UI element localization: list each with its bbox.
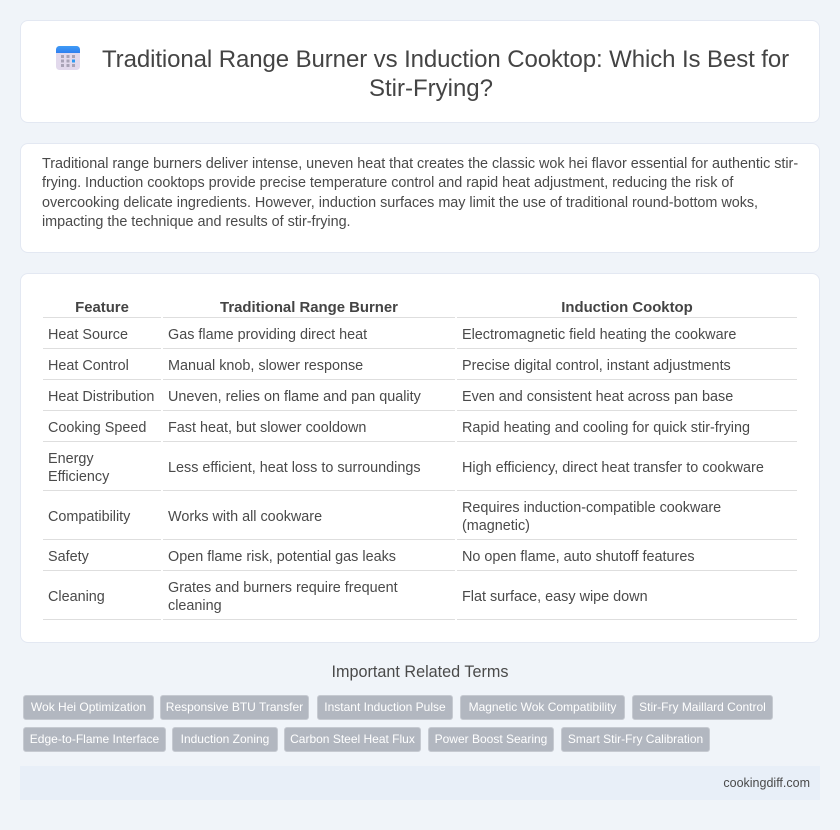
tag: Instant Induction Pulse bbox=[324, 700, 446, 714]
comparison table: Open flame risk, potential gas leaks bbox=[168, 549, 396, 565]
intro paragraph: overcooking delicate ingredients. However, induction surfaces may limit the use of traditional round-bottom woks, bbox=[42, 195, 758, 211]
tag bbox=[23, 727, 166, 752]
title: Traditional Range Burner vs Induction Cooktop: Which Is Best for bbox=[102, 46, 789, 73]
comparison table: Traditional Range Burner bbox=[220, 300, 398, 316]
comparison table: Energy bbox=[48, 451, 94, 467]
intro text card bbox=[20, 143, 820, 253]
comparison table: Compatibility bbox=[48, 509, 130, 525]
comparison table: Feature bbox=[75, 300, 129, 316]
tag bbox=[284, 727, 421, 752]
tag bbox=[632, 695, 773, 720]
intro paragraph: frying. Induction cooktops provide precise temperature control and rapid heat adjustment, reducing the risk of bbox=[42, 175, 733, 191]
tag bbox=[23, 695, 154, 720]
comparison table: Uneven, relies on flame and pan quality bbox=[168, 389, 421, 405]
row: heat distribution bbox=[43, 389, 797, 411]
related terms heading: Important Related Terms bbox=[332, 663, 508, 681]
tag: Wok Hei Optimization bbox=[31, 700, 146, 714]
tag: Smart Stir-Fry Calibration bbox=[568, 732, 703, 746]
comparison table: Heat Control bbox=[48, 358, 129, 374]
comparison table: Cooking Speed bbox=[48, 420, 146, 436]
comparison table: Efficiency bbox=[48, 469, 109, 485]
comparison table: Electromagnetic field heating the cookware bbox=[462, 327, 736, 343]
comparison table: Heat Distribution bbox=[48, 389, 154, 405]
tag: Carbon Steel Heat Flux bbox=[290, 732, 415, 746]
comparison table: Even and consistent heat across pan base bbox=[462, 389, 733, 405]
header card bbox=[20, 20, 820, 123]
tag: Stir-Fry Maillard Control bbox=[639, 700, 766, 714]
row: heat source bbox=[43, 327, 797, 349]
row: cleaning bbox=[43, 580, 797, 620]
tag: Magnetic Wok Compatibility bbox=[469, 700, 616, 714]
footer bar bbox=[20, 766, 820, 800]
title bbox=[102, 46, 789, 102]
intro paragraph: Traditional range burners deliver intense, uneven heat that creates the classic wok hei flavor essential for authentic stir- bbox=[42, 156, 798, 172]
row: cooking speed bbox=[43, 420, 797, 442]
comparison table: Manual knob, slower response bbox=[168, 358, 363, 374]
tag: Edge-to-Flame Interface bbox=[30, 732, 159, 746]
tag bbox=[561, 727, 710, 752]
comparison table card bbox=[20, 273, 820, 643]
tag bbox=[428, 727, 554, 752]
comparison table: cleaning bbox=[168, 598, 222, 614]
tag bbox=[160, 695, 309, 720]
tag bbox=[460, 695, 625, 720]
comparison table: Safety bbox=[48, 549, 89, 565]
tag: Responsive BTU Transfer bbox=[166, 700, 303, 714]
tag bbox=[317, 695, 453, 720]
comparison table: No open flame, auto shutoff features bbox=[462, 549, 695, 565]
comparison table: Precise digital control, instant adjustments bbox=[462, 358, 731, 374]
intro paragraph bbox=[42, 156, 798, 230]
row: compatibility bbox=[43, 500, 797, 540]
comparison table: Gas flame providing direct heat bbox=[168, 327, 367, 343]
comparison table: Flat surface, easy wipe down bbox=[462, 589, 648, 605]
icon: calendar bbox=[56, 46, 80, 70]
comparison table: Less efficient, heat loss to surroundings bbox=[168, 460, 421, 476]
comparison table: Rapid heating and cooling for quick stir-frying bbox=[462, 420, 750, 436]
comparison table: High efficiency, direct heat transfer to cookware bbox=[462, 460, 764, 476]
row: safety bbox=[43, 549, 797, 571]
comparison table: Works with all cookware bbox=[168, 509, 322, 525]
comparison table: Requires induction-compatible cookware bbox=[462, 500, 721, 516]
comparison table: Grates and burners require frequent bbox=[168, 580, 398, 596]
related terms tags bbox=[23, 695, 773, 752]
tag: Induction Zoning bbox=[181, 732, 269, 746]
comparison table: Fast heat, but slower cooldown bbox=[168, 420, 366, 436]
footer source: cookingdiff.com bbox=[723, 776, 810, 790]
tag: Power Boost Searing bbox=[435, 732, 547, 746]
comparison table: Heat Source bbox=[48, 327, 128, 343]
intro paragraph: impacting the technique and results of stir-frying. bbox=[42, 214, 351, 230]
comparison table bbox=[43, 300, 797, 620]
tag bbox=[172, 727, 278, 752]
comparison table: Induction Cooktop bbox=[561, 300, 693, 316]
row: energy efficiency bbox=[43, 451, 797, 491]
table header bbox=[43, 300, 797, 318]
comparison table: Cleaning bbox=[48, 589, 105, 605]
title: Stir-Frying? bbox=[369, 75, 493, 102]
comparison table: (magnetic) bbox=[462, 518, 530, 534]
row: heat control bbox=[43, 358, 797, 380]
